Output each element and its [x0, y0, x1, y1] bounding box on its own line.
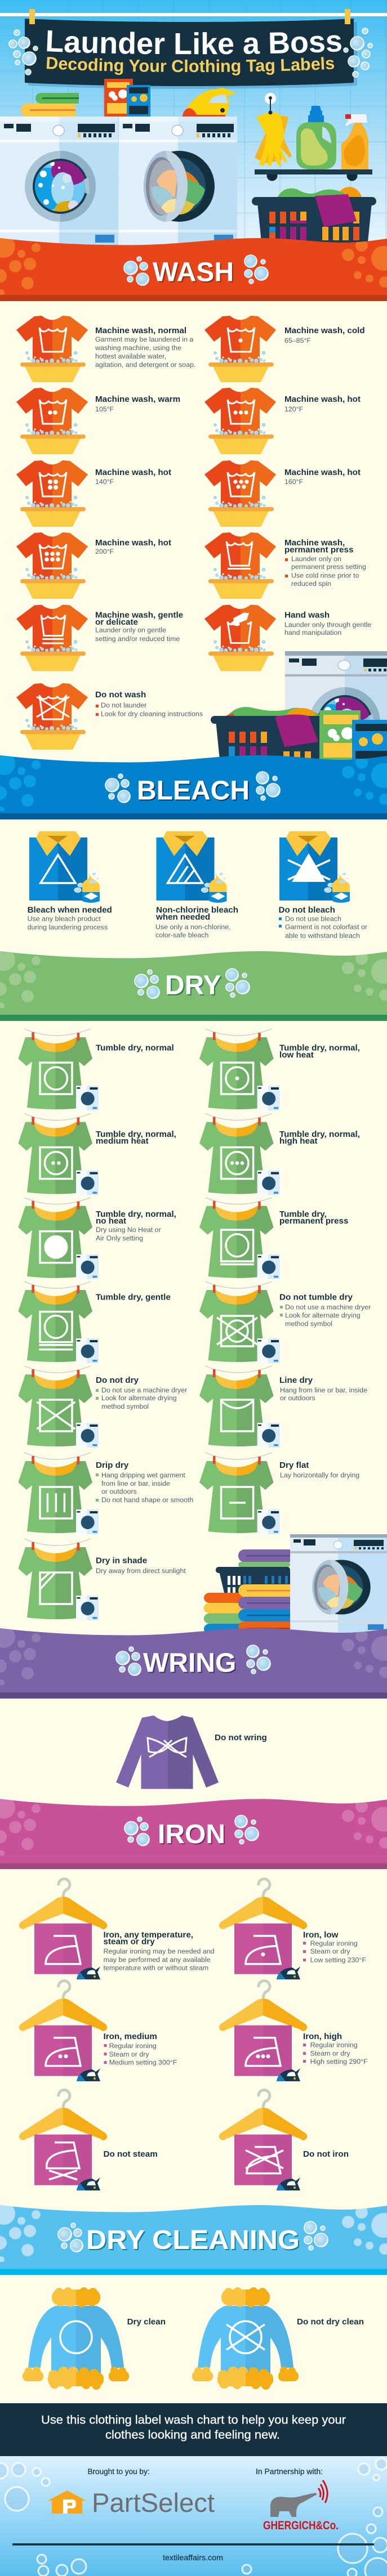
closed door [25, 151, 96, 222]
heading: wash: WASH [153, 258, 234, 287]
footer message: clothes looking and feeling new. [105, 2428, 280, 2441]
item: tumble dry normal: Tumble dry, normal [96, 1043, 174, 1053]
item: tumble dry no heat: Tumble dry, normal, [96, 1209, 176, 1219]
band: wring [0, 1625, 387, 1699]
item: tumble dry low heat [199, 1029, 360, 1110]
item: do not bleach: Garment is not colorfast or [285, 923, 367, 931]
item: tumble dry normal [18, 1029, 174, 1110]
item: gentle [16, 604, 183, 671]
item: tumble dry no heat [18, 1198, 176, 1279]
item: do not dry: method symbol [101, 1403, 149, 1410]
shelf [255, 169, 372, 181]
bubbles [124, 1817, 149, 1845]
item: machine wash hot 140: Machine wash, hot [95, 468, 171, 477]
heading: wring: WRING [143, 1648, 236, 1678]
item: bleach when needed: Bleach when needed [28, 906, 112, 915]
item: machine wash hot 120: 120°F [284, 405, 304, 413]
title: Launder Like a Boss [47, 30, 341, 54]
item: machine wash hot 120: Machine wash, hot [284, 395, 361, 404]
item: do not dry: Do not dry [96, 1376, 139, 1385]
item: line dry: Line dry [279, 1376, 313, 1385]
item: machine wash hot 140 [16, 460, 171, 527]
heading: bleach: BLEACH [137, 776, 250, 806]
open door [144, 151, 215, 222]
item: permanent press: Launder only on [291, 555, 341, 563]
heading: dry: DRY [165, 971, 221, 1001]
gloves [255, 93, 292, 166]
item: do not bleach [278, 831, 367, 940]
item: machine wash hot 200: 200°F [95, 548, 114, 555]
item: tumble dry medium heat: medium heat [96, 1136, 149, 1146]
washing machines [0, 117, 237, 246]
item: hand wash: Launder only through gentle [284, 621, 371, 629]
item: do not tumble dry: Do not tumble dry [279, 1292, 353, 1302]
item: drip dry: Do not hand shape or smooth [101, 1496, 193, 1504]
item: permanent press [204, 532, 366, 599]
item: machine wash normal: hottest available water, [95, 352, 166, 360]
item: do not bleach: Do not bleach [278, 906, 335, 915]
clothes iron [183, 88, 237, 117]
item: machine wash normal: Garment may be laundered in a [95, 335, 193, 343]
item: tumble dry gentle [18, 1282, 171, 1363]
item: iron medium [19, 1981, 177, 2081]
item: tumble dry medium heat: Tumble dry, normal, [96, 1130, 176, 1139]
band: dry [0, 948, 387, 1021]
item: machine wash normal [16, 316, 195, 382]
item: drip dry: Drip dry [96, 1461, 129, 1470]
item: do not wring: Do not wring [215, 1733, 267, 1742]
item: machine wash hot 160 [204, 460, 361, 527]
item: tumble dry permanent press [199, 1198, 348, 1279]
item: machine wash warm [16, 388, 180, 454]
item: tumble dry medium heat [18, 1113, 176, 1195]
item: tumble dry low heat: Tumble dry, normal, [279, 1043, 360, 1053]
item: gentle: Machine wash, gentle [95, 610, 183, 620]
item: machine wash warm: 105°F [95, 405, 114, 413]
laundry basket [252, 187, 376, 248]
item: tumble dry no heat: Dry using No Heat or [96, 1226, 161, 1234]
item: do not dry [18, 1366, 187, 1448]
item: do not steam [19, 2090, 158, 2190]
item: iron high: Iron, high [303, 2032, 342, 2041]
footer message: Use this clothing label wash chart to help you keep your [41, 2413, 346, 2427]
band: wash [0, 235, 387, 301]
logo: Ghergich: GHERGICH&Co. [263, 2519, 339, 2532]
item: non-chlorine bleach: Non-chlorine bleach [156, 906, 238, 915]
logo: PartSelect: PartSelect [92, 2488, 215, 2518]
item: iron low: Regular ironing [310, 1939, 358, 1947]
item: dry flat: Lay horizontally for drying [280, 1471, 359, 1479]
item: line dry [199, 1366, 367, 1448]
item: do not wash: Do not launder [101, 701, 146, 709]
wall tiles [0, 0, 387, 248]
item: machine wash hot 200 [16, 532, 171, 599]
panel: wash items [16, 316, 371, 750]
item: do not steam: Do not steam [104, 2149, 158, 2159]
item: iron any temperature: steam or dry [104, 1937, 155, 1947]
item: drip dry [18, 1453, 193, 1534]
item: machine wash warm: Machine wash, warm [95, 395, 180, 404]
item: machine wash normal: washing machine, using the [95, 344, 181, 352]
item: line dry: or outdoors [280, 1394, 315, 1402]
item: non-chlorine bleach: when needed [155, 912, 210, 922]
item: do not tumble dry: Look for alternate drying [285, 1311, 361, 1319]
item: permanent press: permanent press setting [291, 563, 366, 571]
item: iron medium: Regular ironing [109, 2042, 157, 2050]
item: line dry: Hang from line or bar, inside [280, 1386, 367, 1394]
item: do not tumble dry: method symbol [285, 1320, 332, 1328]
subtitle: Decoding Your Clothing Tag Labels [46, 57, 335, 75]
item: machine wash hot 120 [204, 388, 361, 454]
header scene [0, 0, 387, 245]
detergent bottle [296, 106, 336, 169]
item: machine wash hot 200: Machine wash, hot [95, 538, 171, 548]
item: drip dry: from line or bar, inside [101, 1480, 170, 1488]
heading: dry cleaning: DRY CLEANING [86, 2225, 300, 2255]
band: dry cleaning [0, 2202, 387, 2275]
item: tumble dry high heat: high heat [279, 1136, 318, 1146]
item: dry clean: Dry clean [127, 2317, 166, 2327]
item: non-chlorine bleach: color-safe bleach [155, 931, 208, 939]
item: tumble dry no heat: no heat [96, 1216, 126, 1226]
band: iron [0, 1796, 387, 1869]
item: dry clean [23, 2287, 166, 2390]
item: dry in shade [18, 1539, 186, 1620]
item: do not dry clean [192, 2287, 364, 2390]
item: bleach when needed: during laundering process [28, 924, 108, 931]
item: permanent press: reduced spin [291, 580, 331, 588]
footer message [0, 2403, 387, 2456]
laundry scene: washing [211, 651, 387, 765]
item: machine wash normal: agitation, and detergent or soap. [95, 361, 195, 369]
in partnership with: In Partnership with: [256, 2467, 323, 2476]
item: iron low: Iron, low [303, 1930, 339, 1939]
item: do not wash: Do not wash [95, 690, 146, 700]
panel: dry cleaning items [23, 2287, 364, 2390]
item: do not dry: Do not use a machine dryer [101, 1386, 187, 1394]
bubbles [244, 255, 268, 284]
brought to you by: Brought to you by: [88, 2467, 150, 2476]
item: iron high [219, 1981, 368, 2081]
item: iron any temperature: Regular ironing may be needed and [104, 1947, 215, 1955]
item: do not wash: Look for dry cleaning instructions [101, 710, 203, 718]
detergent boxes [104, 79, 150, 117]
item: do not tumble dry [199, 1282, 371, 1363]
item: machine wash normal: Machine wash, normal [95, 326, 186, 335]
item: drip dry: or outdoors [101, 1488, 137, 1495]
item: iron low [219, 1879, 366, 1979]
item: iron high: Regular ironing [310, 2041, 358, 2049]
item: do not dry: Look for alternate drying [101, 1394, 177, 1402]
bubbles left [9, 30, 38, 75]
bubbles [124, 257, 149, 285]
spray bottle [341, 114, 368, 169]
item: do not dry clean: Do not dry clean [297, 2317, 364, 2327]
bubbles [105, 774, 130, 803]
item: iron medium: Steam or dry [109, 2050, 149, 2058]
item: do not iron: Do not iron [303, 2149, 349, 2159]
item: tumble dry high heat [199, 1113, 360, 1195]
sponsor footer [0, 2456, 387, 2576]
item: do not wring [116, 1715, 267, 1789]
item: tumble dry low heat: low heat [279, 1050, 314, 1060]
item: do not bleach: able to withstand bleach [285, 932, 360, 940]
item: machine wash hot 140: 140°F [95, 478, 114, 486]
item: dry flat [199, 1453, 359, 1534]
item: tumble dry no heat: Air Only setting [96, 1234, 143, 1242]
item: do not wash [16, 683, 203, 750]
item: machine wash cold [204, 316, 365, 382]
item: tumble dry gentle: Tumble dry, gentle [96, 1292, 171, 1302]
item: do not bleach: Do not use bleach [285, 915, 341, 923]
item: dry in shade: Dry away from direct sunlight [96, 1567, 186, 1575]
item: iron any temperature: temperature with or without steam [104, 1964, 208, 1972]
band: bleach [0, 752, 387, 819]
item: non-chlorine bleach: Use only a non-chlorine, [155, 923, 231, 931]
bubbles [116, 1647, 141, 1675]
item: iron low: Low setting 230°F [310, 1956, 366, 1964]
panel: dry items [18, 1029, 371, 1620]
item: dry flat: Dry flat [279, 1461, 309, 1470]
item: gentle: or delicate [95, 617, 138, 627]
item: non-chlorine bleach [155, 831, 238, 939]
item: bleach when needed [28, 831, 112, 931]
item: iron high: Steam or dry [310, 2050, 350, 2058]
item: iron high: High setting 290°F [310, 2058, 368, 2066]
item: bleach when needed: Use any bleach product [28, 915, 101, 923]
item: gentle: Launder only on gentle [95, 626, 166, 634]
item: permanent press: Machine wash, [284, 538, 345, 548]
item: iron any temperature [19, 1879, 215, 1979]
item: iron medium: Iron, medium [104, 2032, 157, 2041]
panel: bleach items [28, 831, 367, 940]
footer bubbles [0, 2458, 387, 2576]
bubbles [247, 1645, 270, 1674]
item: machine wash hot 160: 160°F [284, 478, 304, 486]
heading: iron: IRON [158, 1820, 225, 1849]
bubbles [256, 772, 280, 800]
panel: iron items [19, 1879, 368, 2190]
item: tumble dry high heat: Tumble dry, normal, [279, 1130, 360, 1139]
bubbles [235, 1815, 259, 1844]
item: machine wash cold: 65–85°F [284, 337, 311, 344]
item: machine wash cold: Machine wash, cold [284, 326, 365, 335]
bubbles [226, 969, 250, 997]
item: gentle: setting and/or reduced time [95, 635, 180, 643]
item: iron medium: Medium setting 300°F [109, 2059, 177, 2067]
bubbles [135, 970, 159, 998]
bubbles right [344, 28, 372, 77]
logo: Ghergich [263, 2480, 339, 2532]
bubbles [58, 2223, 83, 2252]
item: hand wash [204, 604, 371, 671]
item: machine wash hot 160: Machine wash, hot [284, 468, 361, 477]
bubbles [304, 2221, 328, 2250]
title banner [8, 9, 373, 89]
item: tumble dry permanent press: permanent press [279, 1216, 348, 1226]
item: do not iron [219, 2090, 349, 2190]
item: drip dry: Hang dripping wet garment [101, 1471, 185, 1479]
laundry scene: dryer and towels [204, 1534, 387, 1635]
item: do not tumble dry: Do not use a machine dryer [285, 1303, 371, 1311]
item: iron any temperature: Iron, any temperature, [104, 1930, 193, 1939]
item: permanent press: Use cold rinse prior to [291, 572, 359, 580]
item: iron any temperature: may be performed at any available [104, 1956, 211, 1964]
item: tumble dry permanent press: Tumble dry, [279, 1209, 327, 1219]
item: hand wash: Hand wash [284, 610, 330, 620]
item: dry in shade: Dry in shade [96, 1556, 147, 1566]
item: hand wash: hand manipulation [284, 629, 341, 637]
item: permanent press: permanent press [284, 545, 353, 555]
site url: textileaffairs.com [163, 2553, 223, 2562]
item: iron low: Steam or dry [310, 1947, 350, 1955]
towels [21, 93, 79, 117]
